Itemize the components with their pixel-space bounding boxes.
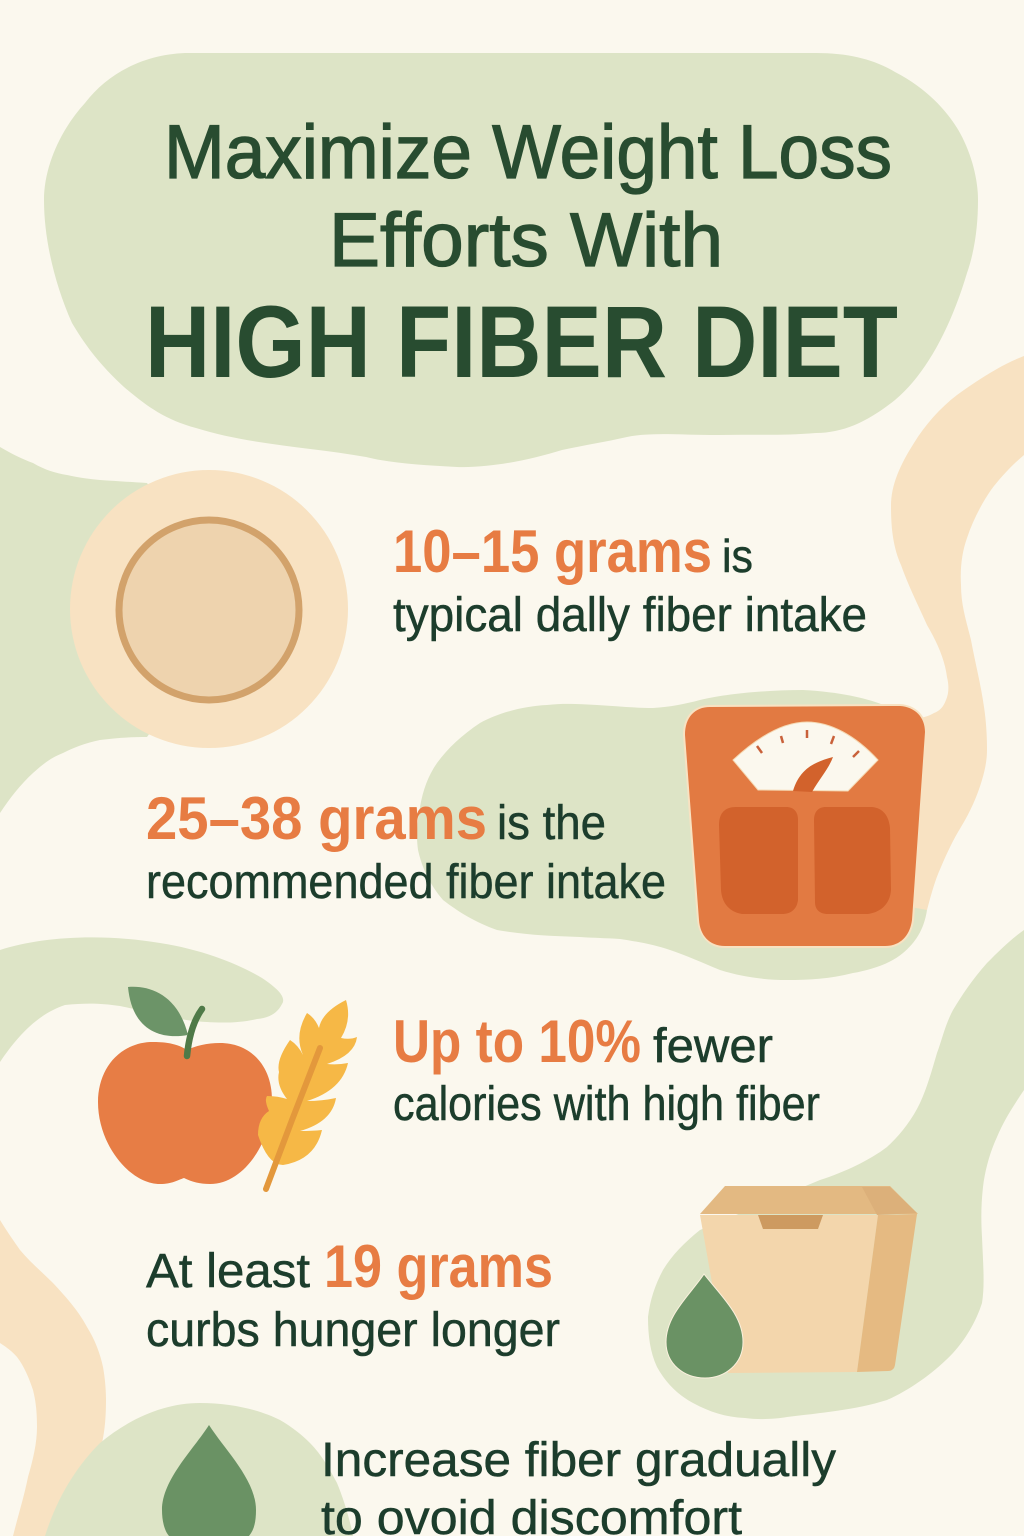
- icon: fiber box and drop: [666, 1186, 918, 1378]
- text: fewer calories: fewer: [653, 1020, 773, 1073]
- text: curbs hunger: [146, 1233, 560, 1357]
- text: recommended intake: recommended fiber intake: [146, 856, 666, 909]
- text: typical daily intake: [393, 518, 867, 642]
- text: typical daily intake: 10–15 grams: [393, 518, 712, 585]
- title: Efforts With: [329, 198, 723, 283]
- text: fewer calories: calories with high fiber: [393, 1078, 820, 1131]
- icon: bathroom scale: [683, 704, 927, 948]
- text: typical daily intake: typical dally fiber intake: [393, 589, 867, 642]
- title: Maximize Weight Loss: [164, 110, 892, 195]
- text: recommended intake: is the: [497, 797, 606, 850]
- title: HIGH FIBER DIET: [145, 285, 898, 399]
- text: fewer calories: Up to 10%: [393, 1008, 641, 1075]
- text: increase gradually: [321, 1434, 836, 1536]
- icon: water drop: [162, 1425, 256, 1536]
- text: typical daily intake: is: [722, 530, 753, 582]
- text: recommended intake: [146, 785, 666, 909]
- text: recommended intake: 25–38 grams: [146, 785, 487, 852]
- text: curbs hunger: At least: [146, 1245, 310, 1298]
- text: curbs hunger: 19 grams: [324, 1233, 553, 1300]
- text: fewer calories: [393, 1008, 820, 1131]
- text: curbs hunger: curbs hunger longer: [146, 1304, 560, 1357]
- text: increase gradually: Increase fiber gradually: [321, 1434, 836, 1487]
- icon: apple and wheat: [98, 987, 357, 1189]
- title: [145, 110, 898, 399]
- icon: plate: [70, 470, 348, 748]
